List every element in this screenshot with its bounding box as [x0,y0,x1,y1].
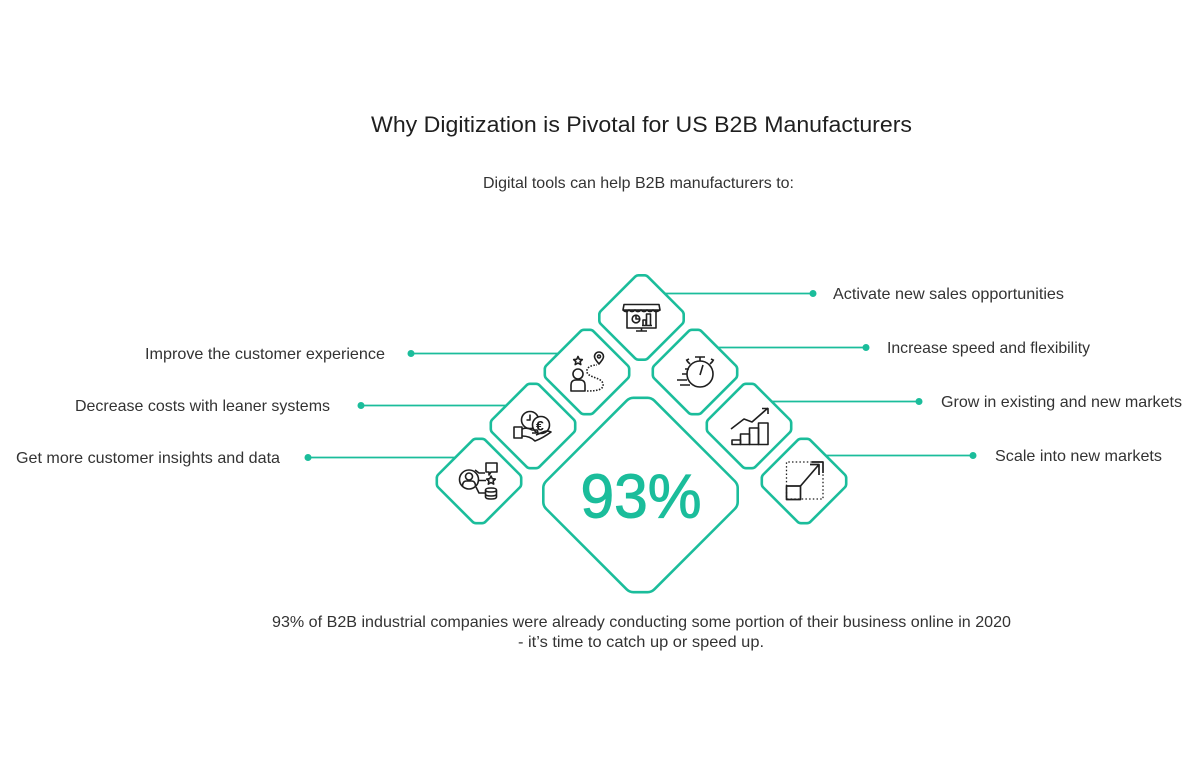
diamond: insights [437,439,521,523]
label: increase speed and flexibility: Increase speed and flexibility [887,340,1090,357]
closing statement [272,614,1011,651]
label: improve the customer experience [145,346,562,363]
label: improve the customer experience: Improve the customer experience [145,346,385,363]
diamond: scale [762,439,846,523]
diamond: customer experience [545,330,629,414]
icon: scale up arrow [786,462,823,500]
label: get more customer insights and data [16,450,459,467]
label: scale into new markets: Scale into new markets [995,448,1162,465]
diamond: growth [707,384,791,468]
big number: 93% [580,462,702,532]
label: decrease costs with leaner systems [75,398,510,415]
label: activate new sales opportunities [662,286,1064,303]
diamond: speed [653,330,737,414]
diamond: sales opportunities [599,275,684,360]
icon: customer data [460,463,497,499]
icon: stopwatch [677,357,714,387]
label: grow in existing and new markets [770,394,1182,411]
label: activate new sales opportunities: Activate new sales opportunities [833,286,1064,303]
icon: storefront with chart [623,304,660,331]
icon: customer journey [571,352,604,391]
subtitle: Digital tools can help B2B manufacturers to: [483,175,794,192]
icon: hand with clock and euro coin: € [536,418,544,434]
diamond: costs [491,384,575,468]
label: increase speed and flexibility [716,340,1090,357]
diamond: 93% statistic [543,398,738,592]
closing statement: - it’s time to catch up or speed up. [518,634,764,651]
title: Why Digitization is Pivotal for US B2B Manufacturers [371,112,912,137]
label: grow in existing and new markets: Grow in existing and new markets [941,394,1182,411]
icon: rising bar chart [731,408,768,444]
closing statement: 93% of B2B industrial companies were already conducting some portion of their business online in 2020 [272,614,1011,631]
label: decrease costs with leaner systems: Decrease costs with leaner systems [75,398,330,415]
label: scale into new markets [822,448,1162,465]
label: get more customer insights and data: Get more customer insights and data [16,450,280,467]
